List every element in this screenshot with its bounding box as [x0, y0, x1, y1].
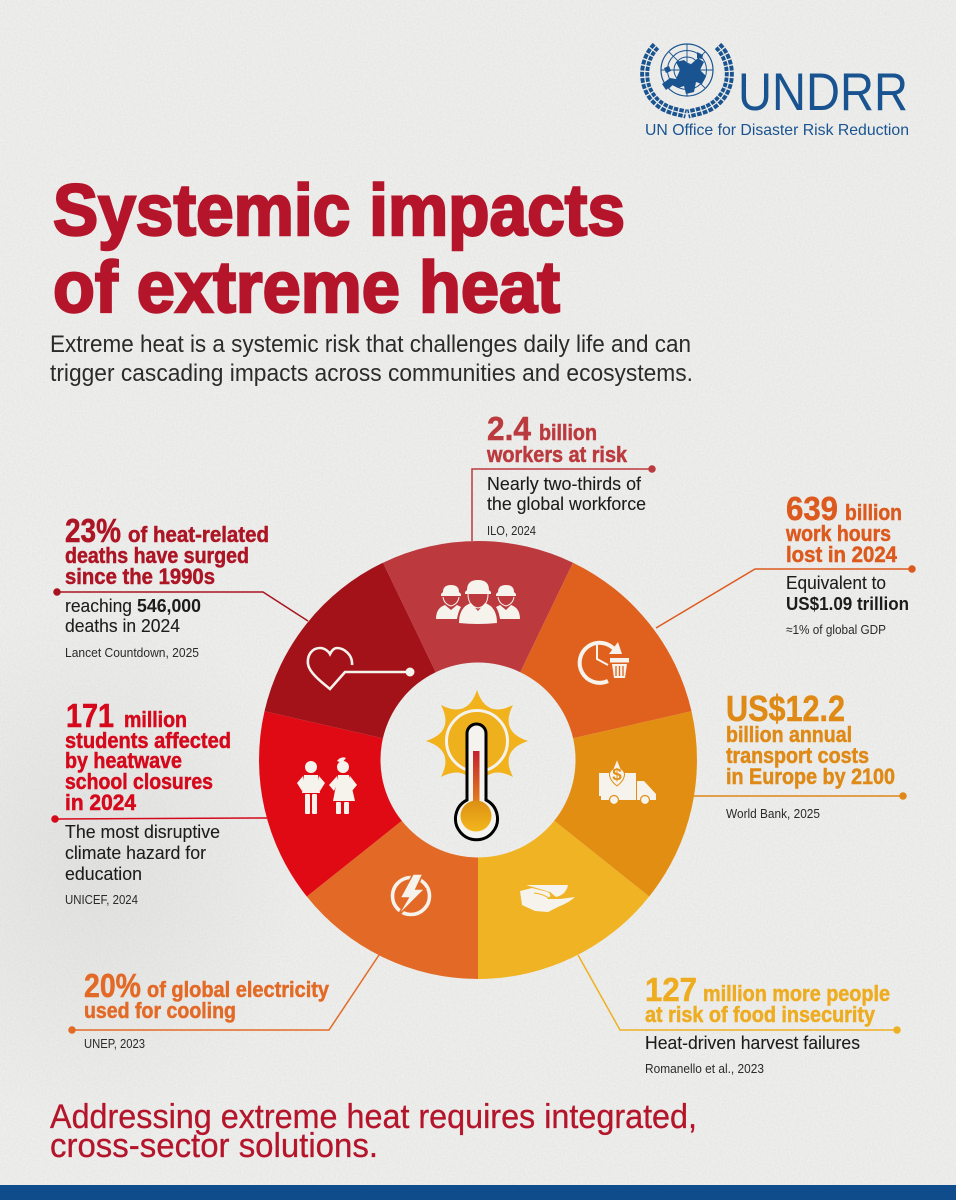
logo: UNDRR [645, 44, 909, 139]
segment: work hours [520, 563, 692, 738]
callout: work hours lost: 639 [786, 490, 838, 527]
callout: transport costs [694, 688, 906, 821]
callout: food insecurity: at risk of food insecurity [645, 1002, 876, 1027]
icon: electricity bolt [392, 874, 430, 917]
connector: electricity [69, 955, 379, 1033]
icon: heart with pulse line [308, 648, 414, 689]
callout: electricity for cooling: used for cooling [84, 998, 236, 1023]
connector: food [578, 955, 900, 1033]
title: of extreme heat [53, 248, 560, 328]
callout: heat-related deaths: deaths have surged [65, 543, 249, 568]
callout: work hours lost: lost in 2024 [786, 542, 898, 567]
callout: food insecurity: Romanello et al., 2023 [645, 1061, 764, 1076]
callout: food insecurity: 127 [645, 971, 697, 1008]
callout: electricity for cooling: of global electricity [147, 977, 330, 1002]
callout: students affected: million [124, 707, 187, 732]
callout: electricity for cooling: 20% [84, 967, 141, 1004]
callout: work hours lost: ≈1% of global GDP [786, 622, 886, 637]
callout: food insecurity: million more people [703, 981, 890, 1006]
icon: UN emblem [645, 44, 729, 114]
segment: workers [383, 541, 573, 672]
callout: students affected: education [65, 864, 142, 884]
subtitle [50, 331, 693, 387]
callout: transport costs: transport costs [726, 743, 869, 768]
connector: work hours [656, 566, 915, 628]
chart: heat impact wheel [259, 541, 697, 979]
logo: UNDRR: UN Office for Disaster Risk Reduction [645, 122, 909, 139]
connector: deaths [54, 589, 308, 621]
callout: workers at risk: ILO, 2024 [487, 523, 536, 538]
callout: workers at risk: Nearly two-thirds of [487, 474, 642, 494]
callout: heat-related deaths: since the 1990s [65, 564, 215, 589]
callout: electricity for cooling: UNEP, 2023 [84, 1036, 145, 1051]
icon: hand holding bowl [520, 885, 575, 912]
segment: students [259, 711, 402, 896]
callout: heat-related deaths: of heat-related [128, 522, 269, 547]
title: Systemic impacts [53, 171, 625, 251]
callout: transport costs: in Europe by 2100 [726, 764, 895, 789]
callout: students affected: in 2024 [65, 790, 137, 815]
callout: workers at risk: 2.4 [487, 410, 532, 447]
connector: transport [694, 793, 906, 799]
closing statement [50, 1098, 697, 1165]
callout: heat-related deaths: reaching [65, 596, 132, 616]
callout: heat-related deaths [54, 512, 308, 660]
callout: work hours lost: Equivalent to [786, 573, 886, 593]
callout: students affected: by heatwave [65, 748, 182, 773]
callout: heat-related deaths: 546,000 [137, 596, 201, 616]
callout: transport costs: US$12.2 [726, 688, 845, 729]
callout: students affected: students affected [65, 728, 231, 753]
callout: electricity for cooling [69, 955, 379, 1051]
icon: truck with dollar sign: $ [612, 765, 622, 784]
icon: sun and thermometer [426, 690, 528, 840]
logo: UNDRR: UNDRR [738, 63, 908, 122]
callout: work hours lost: US$1.09 trillion [786, 594, 909, 614]
callout: transport costs: World Bank, 2025 [726, 806, 820, 821]
connector: workers [472, 466, 655, 541]
callout: work hours lost [656, 490, 915, 637]
subtitle: trigger cascading impacts across communities and ecosystems. [50, 360, 693, 387]
callout: students affected: 171 [66, 697, 114, 734]
callout: work hours lost: billion [845, 500, 902, 525]
callout: heat-related deaths: 23% [65, 512, 121, 549]
segment: electricity [307, 821, 478, 979]
title [53, 171, 625, 328]
callout: students affected: The most disruptive [65, 822, 220, 842]
callout: heat-related deaths: deaths in 2024 [65, 616, 180, 636]
callout: workers at risk: billion [539, 420, 597, 445]
icon: clock and trash [580, 642, 629, 683]
footer bar [0, 1185, 956, 1200]
callout: heat-related deaths: Lancet Countdown, 2025 [65, 645, 199, 660]
callout: food insecurity [578, 955, 900, 1076]
icon: students [297, 757, 357, 814]
subtitle: Extreme heat is a systemic risk that challenges daily life and can [50, 331, 691, 358]
connector: students [52, 816, 267, 822]
callout: students affected: school closures [65, 769, 213, 794]
callout: students affected: climate hazard for [65, 843, 206, 863]
segment: food [478, 821, 649, 979]
callout: workers at risk: workers at risk [486, 442, 628, 467]
callout: food insecurity: Heat-driven harvest failures [645, 1033, 860, 1053]
callout: students affected: UNICEF, 2024 [65, 892, 138, 907]
callout: students affected [52, 697, 267, 907]
closing statement: Addressing extreme heat requires integrated, [50, 1098, 697, 1136]
segment: deaths [264, 563, 436, 738]
icon: truck with dollar sign [599, 759, 656, 804]
callout: workers at risk [472, 410, 655, 541]
icon: workers [436, 580, 520, 624]
callout: transport costs: billion annual [726, 722, 852, 747]
segment: transport [554, 711, 697, 896]
closing statement: cross-sector solutions. [50, 1127, 378, 1165]
callout: workers at risk: the global workforce [487, 494, 646, 514]
callout: work hours lost: work hours [785, 521, 891, 546]
